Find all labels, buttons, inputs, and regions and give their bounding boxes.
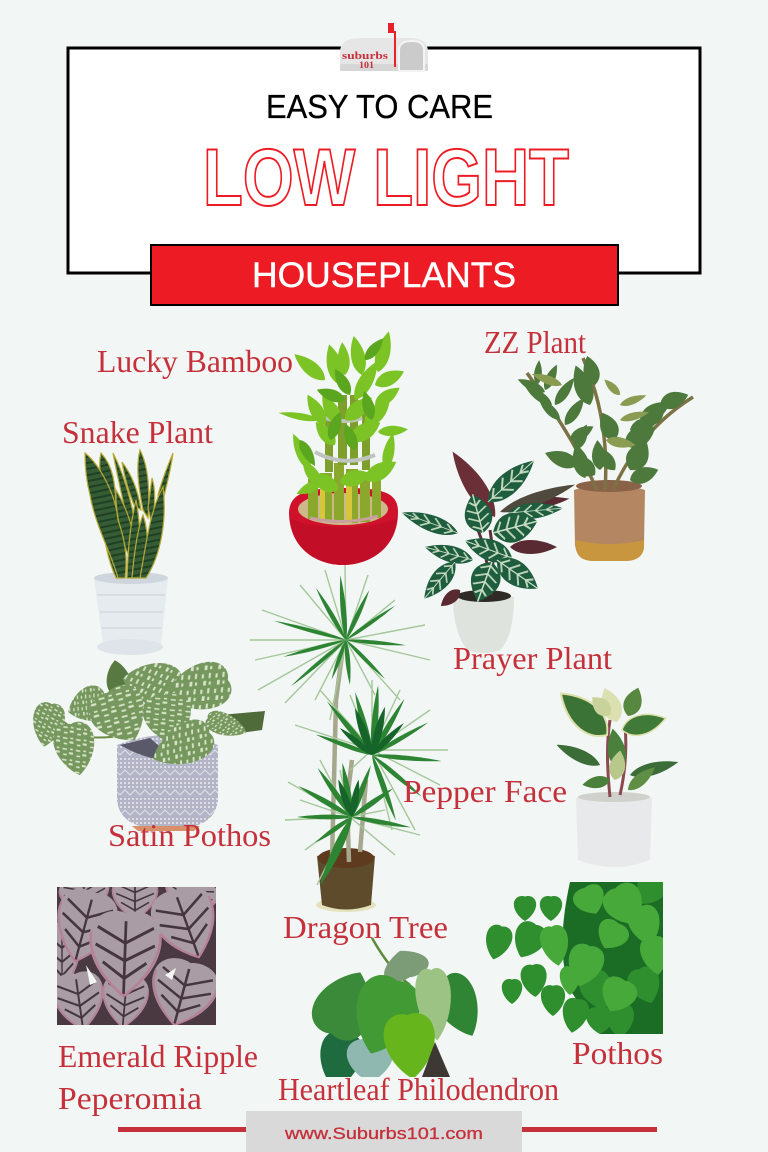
label: lucky bamboo: Lucky Bamboo [97, 343, 293, 379]
footer: website [246, 1111, 522, 1152]
footer rule [118, 1127, 657, 1132]
plant: pothos [486, 882, 663, 1034]
banner: houseplants [151, 245, 618, 305]
label: pepper face: Pepper Face [403, 773, 567, 809]
label: emerald ripple peperomia: Emerald Ripple [58, 1038, 258, 1074]
label: satin pothos: Satin Pothos [108, 817, 271, 853]
header frame [68, 48, 700, 273]
label: prayer plant: Prayer Plant [453, 640, 612, 676]
label: snake plant: Snake Plant [62, 414, 213, 450]
title: low light: LOW LIGHT [203, 133, 569, 223]
plant: prayer plant [399, 446, 577, 653]
plant: heartleaf philodendron [312, 937, 478, 1077]
plant: pepper face [552, 683, 680, 867]
subtitle: easy to care: EASY TO CARE [266, 88, 493, 125]
label: heartleaf philodendron: Heartleaf Philodendron [278, 1071, 559, 1107]
footer: website: www.Suburbs101.com [284, 1124, 483, 1143]
plant: zz plant [516, 354, 693, 561]
plant: satin pothos [28, 657, 265, 831]
label: emerald ripple peperomia [58, 1038, 258, 1116]
logo: suburbs 101 mailbox [340, 23, 428, 71]
plant: lucky bamboo [278, 330, 408, 565]
plant: emerald ripple peperomia [57, 887, 216, 1025]
banner: houseplants: HOUSEPLANTS [252, 256, 516, 295]
plant: snake plant [85, 450, 173, 655]
logo: suburbs 101 mailbox: 101 [359, 60, 375, 70]
plant: dragon tree [250, 565, 448, 912]
label: pothos: Pothos [572, 1035, 663, 1071]
label: zz plant: ZZ Plant [484, 324, 586, 360]
label: emerald ripple peperomia: Peperomia [58, 1080, 202, 1116]
logo: suburbs 101 mailbox: suburbs [342, 51, 388, 62]
label: dragon tree: Dragon Tree [283, 909, 448, 945]
